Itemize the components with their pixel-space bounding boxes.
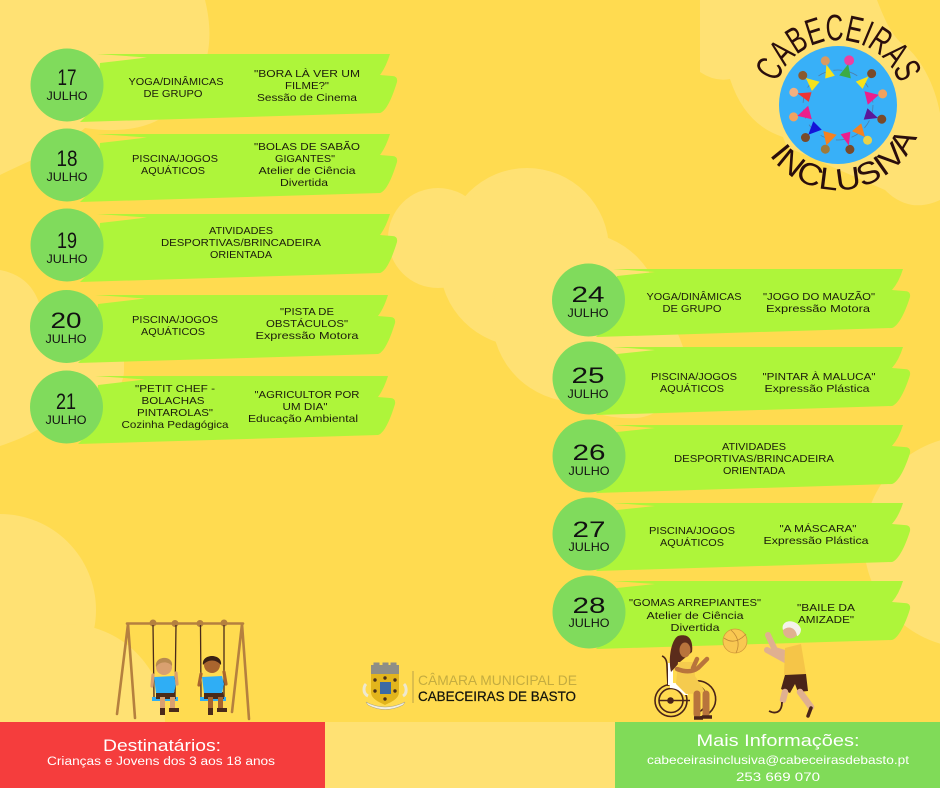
date badge: JULHO xyxy=(568,616,610,630)
date badge: JULHO xyxy=(46,252,88,266)
date badge xyxy=(30,208,104,282)
activity: ORIENTADA xyxy=(723,465,785,477)
illustration: children on swing xyxy=(117,621,249,719)
footer panel: Destinatários xyxy=(0,722,325,788)
activity: PISCINA/JOGOS xyxy=(132,153,218,165)
footer panel: Destinatários: Crianças e Jovens dos 3 aos 18 anos xyxy=(47,756,275,768)
ribbon xyxy=(80,214,397,282)
footer strip: center xyxy=(325,722,615,788)
workshop: GIGANTES" xyxy=(275,153,335,165)
footer panel: Mais Informações: cabeceirasinclusiva@cabeceirasdebasto.pt xyxy=(647,753,910,767)
date badge: JULHO xyxy=(568,540,610,554)
wheelchair xyxy=(655,656,716,717)
torso xyxy=(784,644,806,675)
municipality name: CABECEIRAS DE BASTO xyxy=(418,688,576,704)
logo: Cabeceiras Inclusiva xyxy=(757,14,920,190)
workshop: Expressão Plástica xyxy=(764,535,869,547)
panel: 27 Julho xyxy=(552,498,910,571)
arms xyxy=(767,635,788,661)
footer panel: Mais Informações: 253 669 070 xyxy=(736,770,820,784)
date badge: JULHO xyxy=(568,464,610,478)
workshop: UM DIA" xyxy=(282,401,328,413)
ribbon xyxy=(596,581,910,649)
ball xyxy=(723,629,747,653)
head xyxy=(783,621,801,638)
activity xyxy=(132,314,218,338)
date badge: 20 xyxy=(50,308,82,333)
activity: DE GRUPO xyxy=(144,88,202,100)
workshop: "A MÁSCARA" xyxy=(780,522,857,535)
activity: AQUÁTICOS xyxy=(660,536,724,549)
date badge xyxy=(552,420,626,492)
curved title bottom: INCLUSIVA xyxy=(771,135,918,190)
child right xyxy=(199,656,227,715)
activity xyxy=(132,153,218,177)
swing frame xyxy=(117,621,249,719)
workshop: Expressão Motora xyxy=(766,303,870,315)
date badge: JULHO xyxy=(46,89,88,103)
workshop xyxy=(797,602,855,626)
date badge: 27 xyxy=(572,517,606,542)
municipality name: CÂMARA MUNICIPAL DE xyxy=(418,672,577,688)
date badge xyxy=(30,370,103,444)
activity: "PETIT CHEF - xyxy=(135,383,216,395)
date badge: JULHO xyxy=(568,387,608,401)
ribbon xyxy=(596,347,910,415)
panel: 25 Julho xyxy=(552,342,910,415)
workshop: "BAILE DA xyxy=(797,602,855,614)
activity: ORIENTADA xyxy=(210,249,272,261)
activity xyxy=(674,441,834,477)
curved title top: CABECEIRAS xyxy=(757,14,920,80)
activity xyxy=(651,371,737,395)
workshop xyxy=(762,370,876,395)
date badge xyxy=(552,498,626,570)
activity: AQUÁTICOS xyxy=(141,325,205,338)
workshop: Divertida xyxy=(280,177,328,189)
illustration: girl in wheelchair xyxy=(655,629,747,718)
girl xyxy=(670,635,712,718)
activity xyxy=(122,383,229,431)
activity: PISCINA/JOGOS xyxy=(649,525,735,537)
workshop: "BORA LÀ VER UM xyxy=(254,67,360,80)
shorts xyxy=(781,674,808,693)
workshop: "PINTAR À MALUCA" xyxy=(762,370,876,383)
workshop: Sessão de Cinema xyxy=(257,92,357,104)
ribbon xyxy=(596,269,910,337)
activity xyxy=(649,525,735,549)
activity xyxy=(161,225,321,261)
activity: Divertida xyxy=(670,622,720,634)
date badge xyxy=(30,128,104,202)
activity: "GOMAS ARREPIANTES" xyxy=(629,597,761,609)
workshop: Atelier de Ciência xyxy=(258,165,356,177)
activity: YOGA/DINÂMICAS xyxy=(646,290,742,303)
date badge: 18 xyxy=(56,146,78,171)
workshop: "PISTA DE xyxy=(280,306,334,318)
activity: ATIVIDADES xyxy=(722,441,786,453)
date badge: 19 xyxy=(57,228,77,253)
date badge xyxy=(552,264,625,336)
ribbon xyxy=(80,54,397,122)
panel: 24 Julho xyxy=(552,264,910,337)
activity: PINTAROLAS" xyxy=(137,407,213,419)
workshop: Expressão Plástica xyxy=(764,383,870,395)
child left xyxy=(152,658,179,715)
activity: PISCINA/JOGOS xyxy=(651,371,737,383)
activity: DESPORTIVAS/BRINCADEIRA xyxy=(674,453,834,465)
crest xyxy=(364,663,406,710)
date badge: 28 xyxy=(572,593,606,618)
activity: PISCINA/JOGOS xyxy=(132,314,218,326)
panel: 20 Julho xyxy=(30,290,395,363)
logo circle xyxy=(779,46,897,164)
date badge xyxy=(30,290,103,363)
date badge: 24 xyxy=(572,282,604,307)
activity: DE GRUPO xyxy=(662,303,722,315)
panel: 18 Julho xyxy=(30,128,397,202)
workshop: "JOGO DO MAUZÃO" xyxy=(763,290,875,303)
workshop: Educação Ambiental xyxy=(248,413,358,425)
date badge: 21 xyxy=(56,389,76,414)
separator xyxy=(412,671,414,703)
activity: AQUÁTICOS xyxy=(660,382,724,395)
logo: Câmara Municipal de Cabeceiras de Basto xyxy=(364,663,577,710)
date badge: JULHO xyxy=(46,332,86,346)
ribbon xyxy=(80,134,397,202)
swing ropes xyxy=(153,625,224,698)
workshop: "AGRICULTOR POR xyxy=(254,389,360,401)
workshop xyxy=(764,522,869,547)
activity: YOGA/DINÂMICAS xyxy=(128,75,224,88)
workshop xyxy=(254,140,360,189)
ribbon xyxy=(78,376,395,444)
workshop xyxy=(763,290,875,315)
panel: 28 Julho xyxy=(552,576,910,649)
workshop: AMIZADE" xyxy=(798,614,854,626)
ribbon xyxy=(596,425,910,493)
workshop xyxy=(254,67,360,104)
date badge: 17 xyxy=(58,65,76,90)
date badge: JULHO xyxy=(568,306,608,320)
date badge: 26 xyxy=(572,440,606,465)
date badge xyxy=(552,576,626,648)
footer panel: Mais Informações: Mais Informações: xyxy=(696,731,860,750)
panel: 26 Julho xyxy=(552,420,910,493)
legs xyxy=(800,692,811,707)
panel: 17 Julho xyxy=(30,48,397,122)
panel: 19 Julho xyxy=(30,208,397,282)
workshop xyxy=(256,306,359,342)
date badge xyxy=(30,48,104,122)
ribbon xyxy=(78,295,395,363)
date badge: JULHO xyxy=(46,170,88,184)
activity xyxy=(629,597,761,634)
activity: DESPORTIVAS/BRINCADEIRA xyxy=(161,237,321,249)
date badge: JULHO xyxy=(46,413,86,427)
workshop: Expressão Motora xyxy=(256,330,359,342)
workshop: "BOLAS DE SABÃO xyxy=(254,140,360,153)
illustration: man with prosthetic leg xyxy=(767,621,811,716)
footer panel: Mais Informações xyxy=(615,722,940,788)
activity: Cozinha Pedagógica xyxy=(122,419,229,431)
activity: ATIVIDADES xyxy=(209,225,273,237)
date badge xyxy=(552,342,626,414)
workshop: OBSTÁCULOS" xyxy=(266,317,348,330)
footer panel: Destinatários: Destinatários: xyxy=(103,736,221,755)
activity xyxy=(128,75,224,100)
municipality name xyxy=(418,672,577,704)
activity xyxy=(646,290,742,315)
activity: Atelier de Ciência xyxy=(646,610,744,622)
date badge: 25 xyxy=(572,363,604,388)
ribbon xyxy=(596,503,910,571)
workshop: FILME?" xyxy=(285,80,329,92)
activity: BOLACHAS xyxy=(142,395,204,407)
children ring xyxy=(787,54,889,155)
panel: 21 Julho xyxy=(30,370,395,444)
activity: AQUÁTICOS xyxy=(141,164,205,177)
workshop xyxy=(248,389,360,425)
